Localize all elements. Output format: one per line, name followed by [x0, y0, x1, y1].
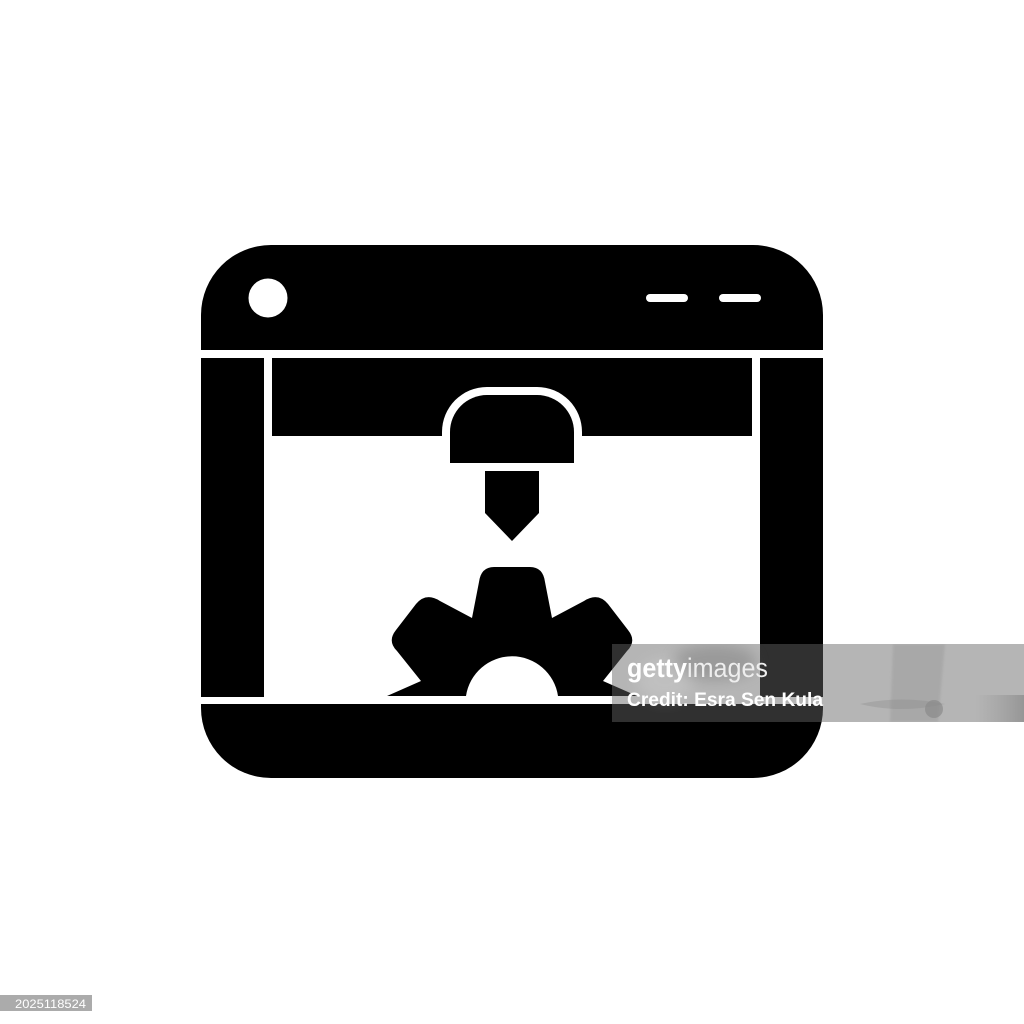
icon: window dash button right — [719, 294, 761, 302]
id number: 2025118524 — [15, 999, 87, 1011]
printer top beam — [272, 358, 752, 436]
image id tag — [0, 995, 92, 1011]
right column — [760, 358, 823, 697]
left column — [201, 358, 264, 697]
window bottom bar — [201, 704, 823, 778]
icon: window circle button — [248, 278, 288, 318]
icon: window dash button left — [646, 294, 688, 302]
nozzle — [485, 471, 539, 541]
watermark logo: gettyimages — [627, 653, 768, 683]
watermark band — [612, 644, 1024, 722]
print head — [450, 395, 574, 463]
icon: browser window 3D printer — [201, 245, 823, 778]
watermark blotches — [637, 644, 1024, 722]
id background — [0, 995, 92, 1011]
print head outline — [442, 387, 582, 437]
watermark credit: Credit: Esra Sen Kula — [627, 690, 823, 711]
window header bar — [201, 245, 823, 350]
watermark — [612, 644, 1024, 722]
icon: gear — [387, 567, 637, 696]
